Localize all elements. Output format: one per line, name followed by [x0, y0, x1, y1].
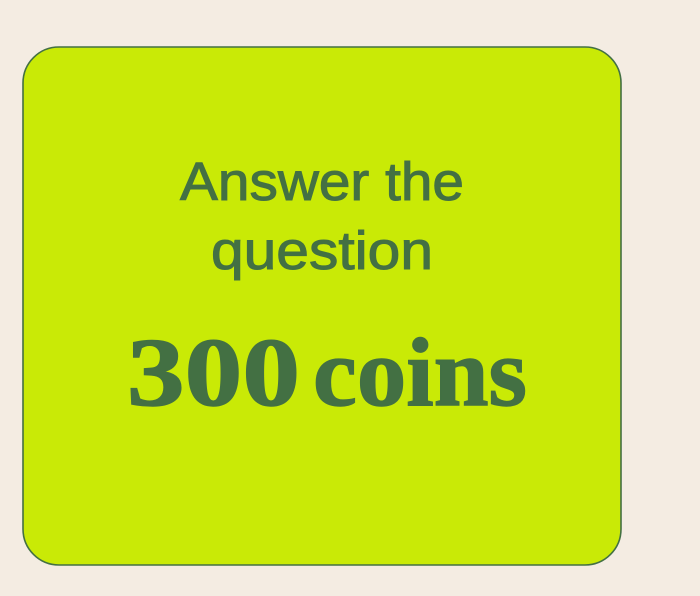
reward amount: 300 coins: [127, 319, 527, 427]
heading: Answer the question: [180, 152, 464, 281]
reward amount: 300 coins: 300: [127, 319, 300, 427]
reward amount: 300 coins: coins: [313, 319, 527, 427]
heading: Answer the question: question: [211, 221, 433, 281]
heading: Answer the question: Answer the: [180, 152, 464, 212]
panel: lime reward card: [23, 47, 621, 565]
